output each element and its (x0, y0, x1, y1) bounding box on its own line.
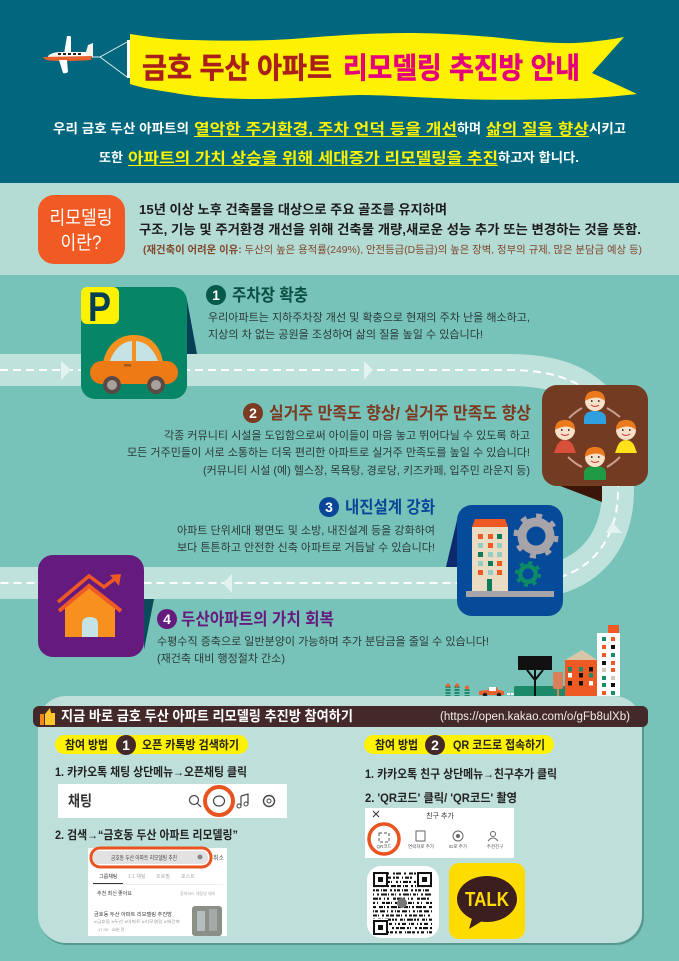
screenshot: search result (88, 848, 227, 936)
screenshot: add friend: 연락처로 추가 (408, 843, 434, 850)
step 1: parking (81, 283, 530, 399)
heading: step 1 (206, 285, 308, 305)
text: step 1 (208, 310, 530, 341)
pill: method 2: QR 코드로 접속하기 (453, 737, 545, 752)
heading: step 2: 2 (249, 405, 257, 421)
intro text: 우리 금호 두산 아파트의 (53, 121, 189, 136)
QR code (367, 866, 439, 938)
screenshot: add friend (365, 808, 514, 858)
badge: 리모델링 이란? (38, 195, 125, 264)
icon: airplane (43, 36, 130, 78)
icon: KakaoTalk logo (449, 863, 525, 939)
intro text: 아파트의 가치 상승을 위해 세대증가 리모델링을 추진 (128, 150, 498, 167)
instruction 2: 2. 검색→“금호동 두산 아파트 리모델링” (55, 828, 238, 842)
banner (130, 33, 637, 100)
text: step 4 (157, 634, 489, 665)
text: step 3 (177, 523, 435, 554)
step 3: seismic design (177, 497, 563, 616)
title: 리모델링 추진방 안내 (343, 52, 580, 85)
road (0, 361, 622, 593)
icon: house with rising arrow (38, 555, 154, 657)
panel: definition (0, 183, 679, 275)
icon: parking car: P (88, 283, 111, 330)
pill: method 1 (55, 735, 248, 755)
screenshot: search result: 1:1 채팅 (128, 873, 146, 880)
screenshot: chat menu: 채팅 (68, 793, 92, 810)
illustration: city skyline (446, 625, 620, 697)
screenshot: search result: 취소 (213, 854, 225, 862)
intro text: 열악한 주거환경, 주차 언덕 등을 개선 (194, 121, 457, 138)
panel: how to join (33, 696, 648, 945)
badge: 리모델링 이란?: 이란? (60, 232, 102, 254)
title (142, 52, 580, 85)
badge: 리모델링 이란?: 리모델링 (50, 207, 112, 229)
icon: parking car (81, 283, 197, 399)
panel: header (0, 0, 679, 183)
text: step 2: 각종 커뮤니티 시설을 도입함으로써 아이들이 마음 놓고 뛰어다닐 수 있도록 하고 (164, 428, 530, 442)
screenshot: search result: 금호동 두산 아파트 리모델링 추진 (111, 854, 177, 862)
icon: KakaoTalk logo: TALK (465, 889, 509, 911)
pill: method 1: 오픈 카톡방 검색하기 (142, 737, 239, 752)
definition text: (재건축이 어려운 이유: 두산의 높은 용적률(249%), 안전등급(D등급)의 높은 장벽, 정부의 규제, 많은 분담금 예상 등) (143, 243, 642, 256)
method 1 (55, 735, 287, 936)
text: step 3: 아파트 단위세대 평면도 및 소방, 내진설계 등을 강화하여 (177, 523, 435, 537)
join bar: (https://open.kakao.com/o/gFb8ulXb) (440, 711, 630, 723)
pill: method 2: 참여 방법 (375, 737, 418, 752)
intro text: 삶의 질을 향상 (486, 121, 589, 138)
definition text: 구조, 기능 및 주거환경 개선을 위해 건축물 개량,새로운 성능 추가 또는 변경하는 것을 뜻함. (139, 222, 641, 237)
heading: step 1: 주차장 확충 (232, 286, 308, 305)
text: step 2: (커뮤니티 시설 (예) 헬스장, 목욕탕, 경로당, 키즈카페, 입주민 라운지 등) (203, 464, 530, 477)
instruction 1: 1. 카카오톡 친구 상단메뉴→친구추가 클릭 (365, 766, 557, 781)
icon: community people (542, 385, 648, 502)
screenshot: search result: 포스트 (181, 874, 195, 880)
intro text: 또한 (99, 150, 123, 165)
text: step 1: 우리아파트는 지하주차장 개선 및 확충으로 현재의 주차 난을 해소하고, (208, 310, 530, 324)
screenshot: search result: 17 05 · 30분 전 (98, 926, 125, 932)
screenshot: chat menu (58, 784, 287, 818)
method 2 (364, 735, 557, 939)
pill: method 1: 1 (122, 737, 130, 753)
instruction 2: 2. 'QR코드' 클릭/ 'QR코드' 촬영 (365, 791, 517, 805)
heading: step 4: 두산아파트의 가치 회복 (181, 610, 334, 629)
icon: building and gears (446, 505, 563, 616)
screenshot: search result: #금호동 #두산 #아파트 #리모델링 #재건축 (94, 918, 180, 924)
pill: method 2 (364, 735, 554, 755)
pill: method 2: 2 (431, 737, 439, 753)
screenshot: search result: 추천 최신 좋아요 (97, 890, 132, 897)
definition text: 15년 이상 노후 건축물을 대상으로 주요 골조를 유지하며 (139, 202, 447, 217)
intro text: 하며 (457, 121, 481, 136)
screenshot: search result: 금호동 두산 아파트 리모델링 추진방 (94, 911, 172, 918)
heading: step 3: 3 (325, 499, 333, 515)
intro text: 하고자 합니다. (498, 150, 579, 165)
intro text: 시키고 (589, 121, 626, 136)
text: step 3: 보다 튼튼하고 안전한 신축 아파트로 거듭날 수 있습니다! (177, 540, 435, 554)
join bar (33, 706, 648, 727)
heading: step 2: 실거주 만족도 향상/ 실거주 만족도 향상 (269, 404, 531, 423)
screenshot: search result: 참여코드 채팅방 제외 (180, 890, 216, 896)
definition text (139, 202, 642, 256)
step 4: value (38, 555, 489, 665)
join bar: 지금 바로 금호 두산 아파트 리모델링 추진방 참여하기 (61, 708, 353, 724)
screenshot: add friend: QR코드 (376, 844, 392, 849)
screenshot: add friend: 친구 추가 (426, 811, 454, 820)
text: step 4: 수평수직 증축으로 일반분양이 가능하며 추가 분담금을 줄일 수 있습니다! (157, 634, 489, 648)
text: step 2: 모든 거주민들이 서로 소통하는 더욱 편리한 아파트로 실거주 만족도를 높일 수 있습니다! (127, 445, 530, 459)
heading: step 1: 1 (212, 287, 220, 303)
heading: step 3 (319, 497, 435, 517)
step 2: satisfaction (127, 385, 648, 502)
screenshot: search result: 프로필 (156, 873, 170, 880)
text: step 2 (127, 428, 530, 477)
heading: step 4: 4 (163, 611, 171, 627)
text: step 4: (재건축 대비 행정절차 간소) (157, 652, 285, 665)
intro text (53, 121, 626, 167)
heading: step 3: 내진설계 강화 (345, 498, 435, 517)
instruction 1: 1. 카카오톡 채팅 상단메뉴→오픈채팅 클릭 (55, 764, 247, 779)
pill: method 1: 참여 방법 (65, 737, 108, 752)
icon: thumbs up (40, 708, 55, 725)
screenshot: add friend: ID로 추가 (449, 843, 467, 850)
text: step 1: 지상의 차 없는 공원을 조성하여 삶의 질을 높일 수 있습니다! (208, 327, 483, 341)
screenshot: search result: 그룹채팅 (99, 873, 117, 880)
title: 금호 두산 아파트 (142, 52, 332, 85)
screenshot: add friend: 추천친구 (487, 843, 503, 850)
